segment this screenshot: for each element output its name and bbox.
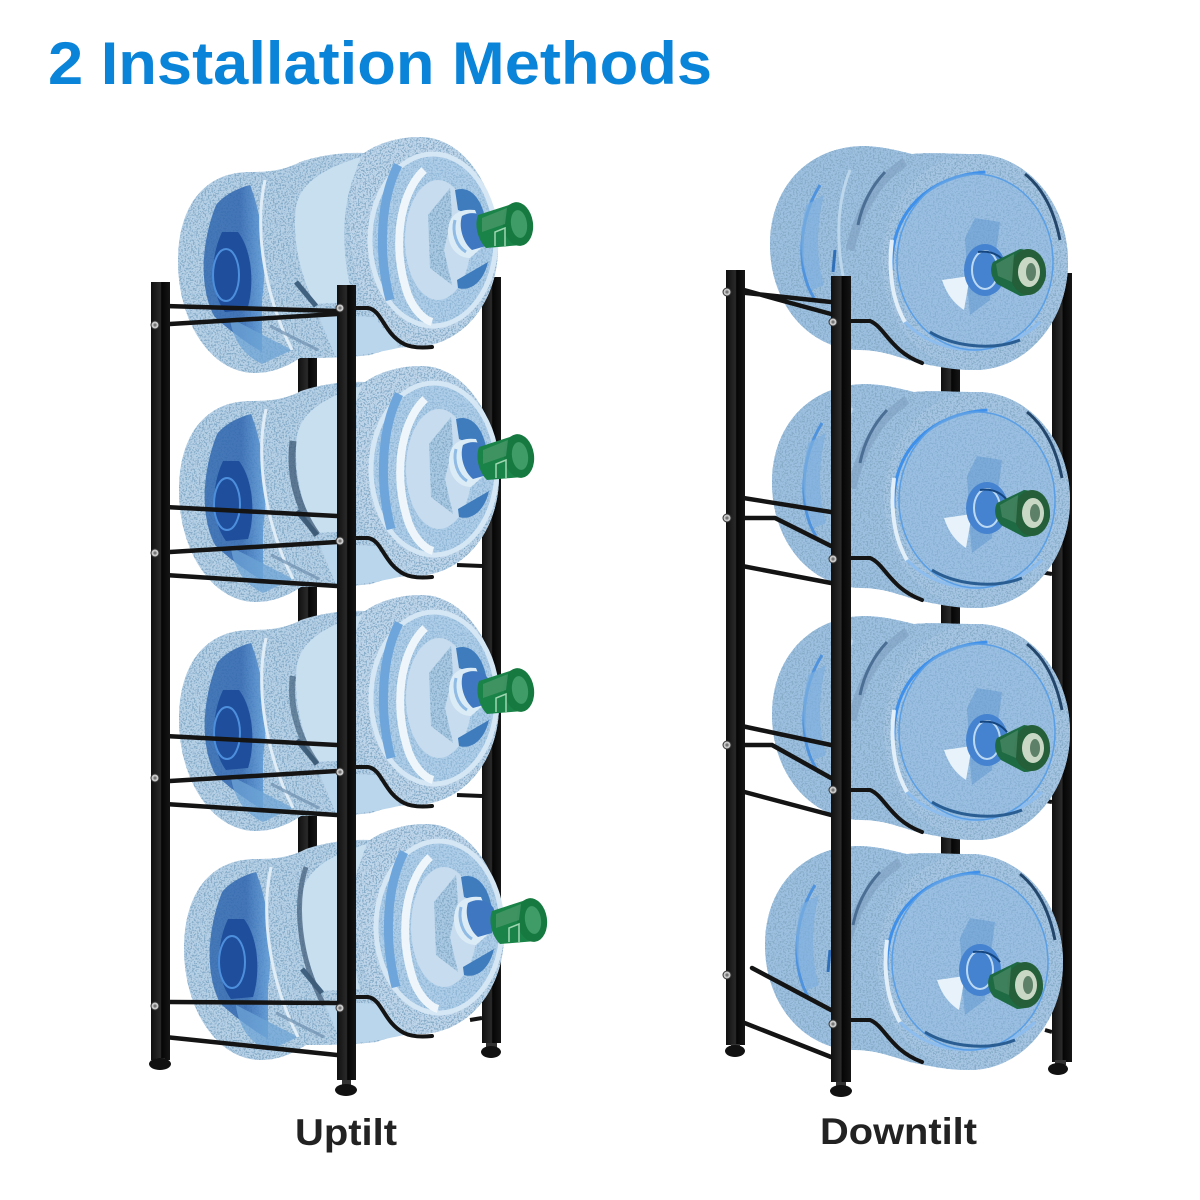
bottle: uptilt tier 4 — [184, 824, 550, 1060]
rack rails: uptilt — [165, 306, 432, 1055]
panel: uptilt rack with bottles — [149, 137, 550, 1096]
rack front posts: downtilt — [723, 270, 852, 1097]
rack front posts: uptilt — [149, 282, 357, 1096]
bottle: uptilt tier 3 — [179, 595, 537, 831]
bottle: downtilt tier 4 — [765, 846, 1063, 1070]
bottle: downtilt tier 3 — [772, 616, 1070, 840]
rack rear posts: downtilt — [941, 273, 1072, 1075]
panel: downtilt rack with bottles — [723, 146, 1072, 1097]
rack rear posts: uptilt — [298, 277, 501, 1058]
bottle: downtilt tier 2 — [772, 384, 1070, 608]
label: uptilt: Uptilt — [295, 1112, 397, 1153]
label: downtilt: Downtilt — [820, 1111, 977, 1152]
bottle: downtilt tier 1 — [770, 146, 1068, 370]
title: 2 Installation Methods — [48, 30, 712, 97]
rack rails: downtilt — [737, 290, 922, 1062]
bottle: uptilt tier 2 — [179, 366, 537, 602]
bottle: uptilt tier 1 — [178, 137, 536, 373]
